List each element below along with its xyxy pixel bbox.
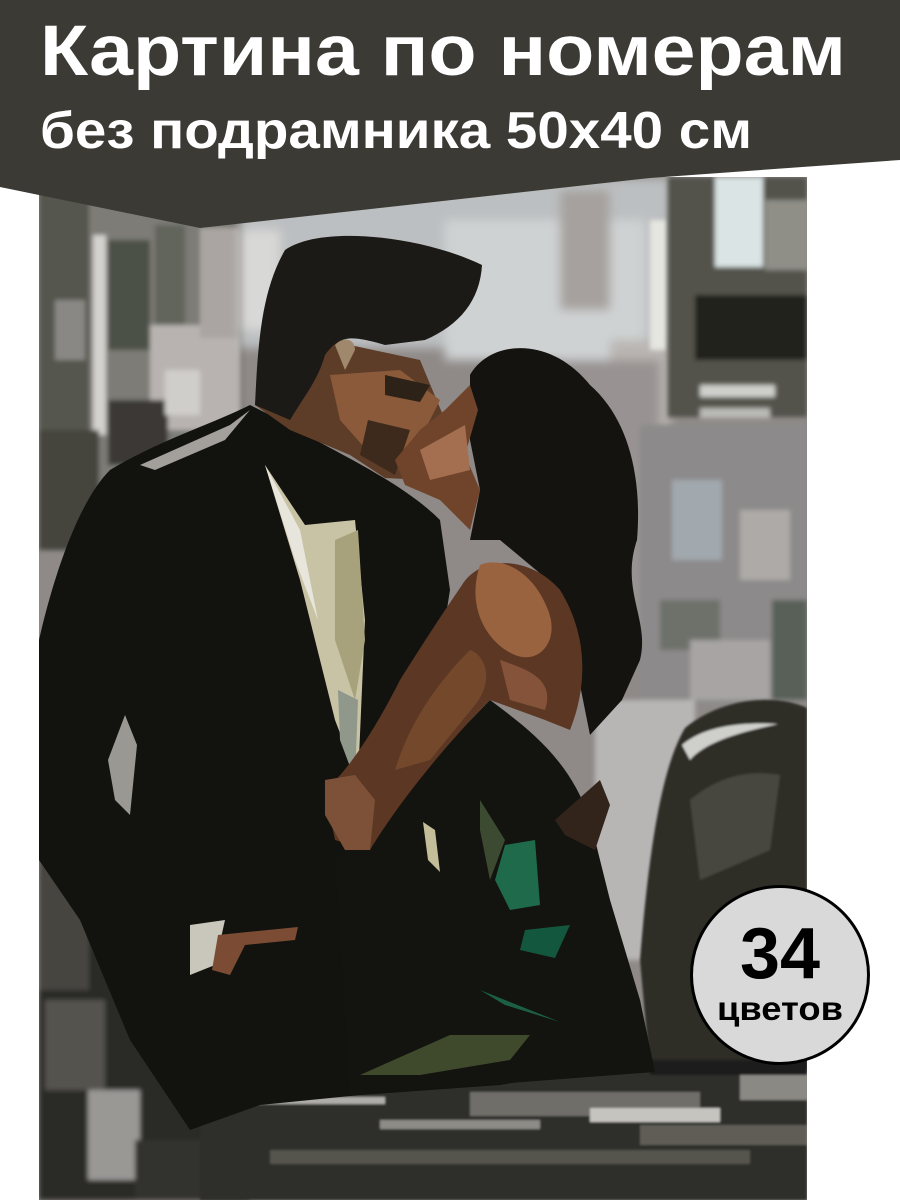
woman's dress (360, 700, 655, 1082)
man's hand and cuff (190, 920, 298, 975)
man's shirt (265, 465, 365, 780)
man's head (255, 236, 482, 480)
background: window edge light (650, 220, 666, 350)
collar highlight (140, 410, 250, 470)
dress highlight (423, 822, 440, 872)
background: right side (595, 177, 807, 960)
woman's hair (470, 348, 642, 735)
background: left wall (39, 177, 244, 550)
painting: couple kissing (39, 177, 807, 1200)
subtitle: без подрамника 50х40 см (40, 102, 752, 160)
background: window light (240, 178, 670, 630)
woman's back and arm (325, 562, 610, 850)
dress green sequins (360, 800, 570, 1075)
pocket square (108, 715, 137, 815)
man's suit (39, 405, 650, 1130)
bottom left corner (39, 850, 249, 1200)
seated figure at right (640, 700, 807, 1070)
header banner (0, 0, 900, 228)
badge: 34 colours: цветов (717, 990, 843, 1027)
woman's face (395, 385, 480, 530)
badge: 34 colours (692, 886, 868, 1064)
badge: 34 colours: 34 (740, 914, 820, 994)
title: Картина по номерам (40, 12, 846, 91)
bottom table (200, 1060, 807, 1200)
